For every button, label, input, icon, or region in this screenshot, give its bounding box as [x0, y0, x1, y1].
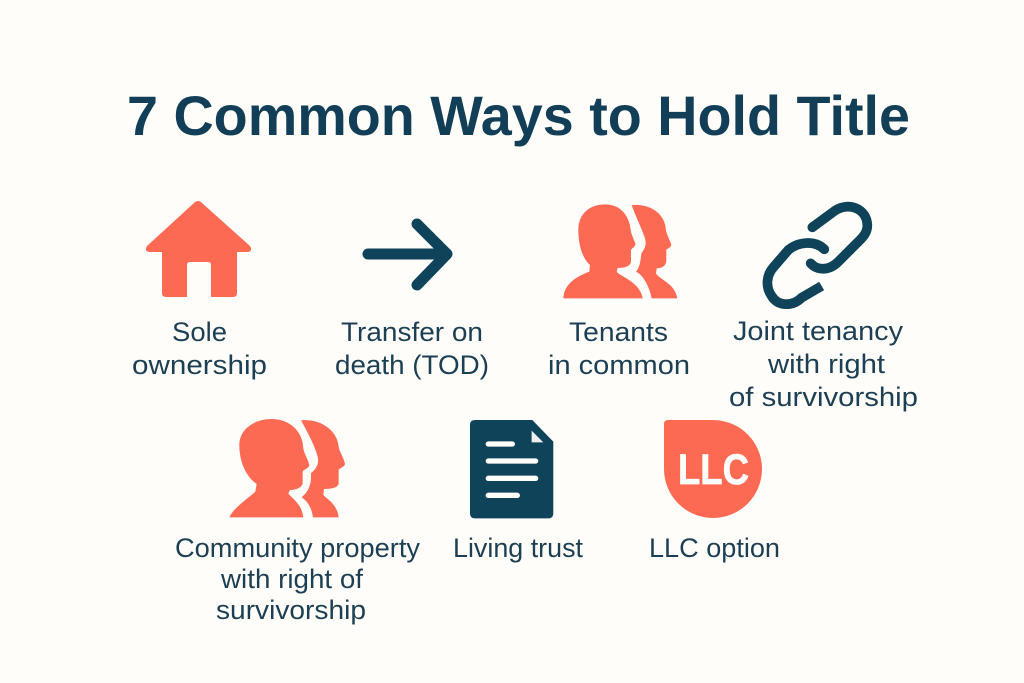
label: community property: with right of	[220, 564, 364, 594]
item: community property	[175, 419, 420, 625]
item: tenants in common	[548, 204, 690, 380]
label: joint tenancy: with right	[767, 349, 886, 379]
icon: two people	[563, 204, 677, 298]
label: transfer on death	[335, 317, 489, 380]
item: joint tenancy	[729, 207, 918, 412]
icon: chain link	[767, 207, 867, 304]
icon: two people	[229, 419, 345, 517]
item: sole ownership	[132, 201, 267, 380]
label: community property: Community property	[175, 533, 420, 563]
icon: document	[470, 420, 553, 518]
item: living trust	[453, 420, 583, 563]
item: llc option	[649, 420, 780, 563]
label: tenants in common: Tenants	[569, 317, 668, 347]
label: joint tenancy: of survivorship	[729, 382, 918, 412]
item: transfer on death	[335, 224, 489, 380]
label: sole ownership: ownership	[132, 350, 267, 380]
label: tenants in common	[548, 317, 690, 380]
label: sole ownership	[132, 317, 267, 380]
label: llc option: LLC option	[649, 533, 780, 563]
label: joint tenancy: Joint tenancy	[733, 316, 904, 346]
label: community property	[175, 533, 420, 625]
icon: house	[146, 201, 251, 297]
label: living trust: Living trust	[453, 533, 583, 563]
icon: arrow	[368, 224, 447, 285]
label: tenants in common: in common	[548, 350, 690, 380]
label: community property: survivorship	[216, 595, 366, 625]
title: 7 Common Ways to Hold Title	[127, 84, 910, 147]
label: transfer on death: death (TOD)	[335, 350, 489, 380]
label: sole ownership: Sole	[172, 317, 227, 347]
icon: llc badge: LLC	[678, 446, 749, 494]
label: transfer on death: Transfer on	[341, 317, 483, 347]
icon: llc badge	[664, 420, 762, 518]
label: joint tenancy	[729, 316, 918, 412]
